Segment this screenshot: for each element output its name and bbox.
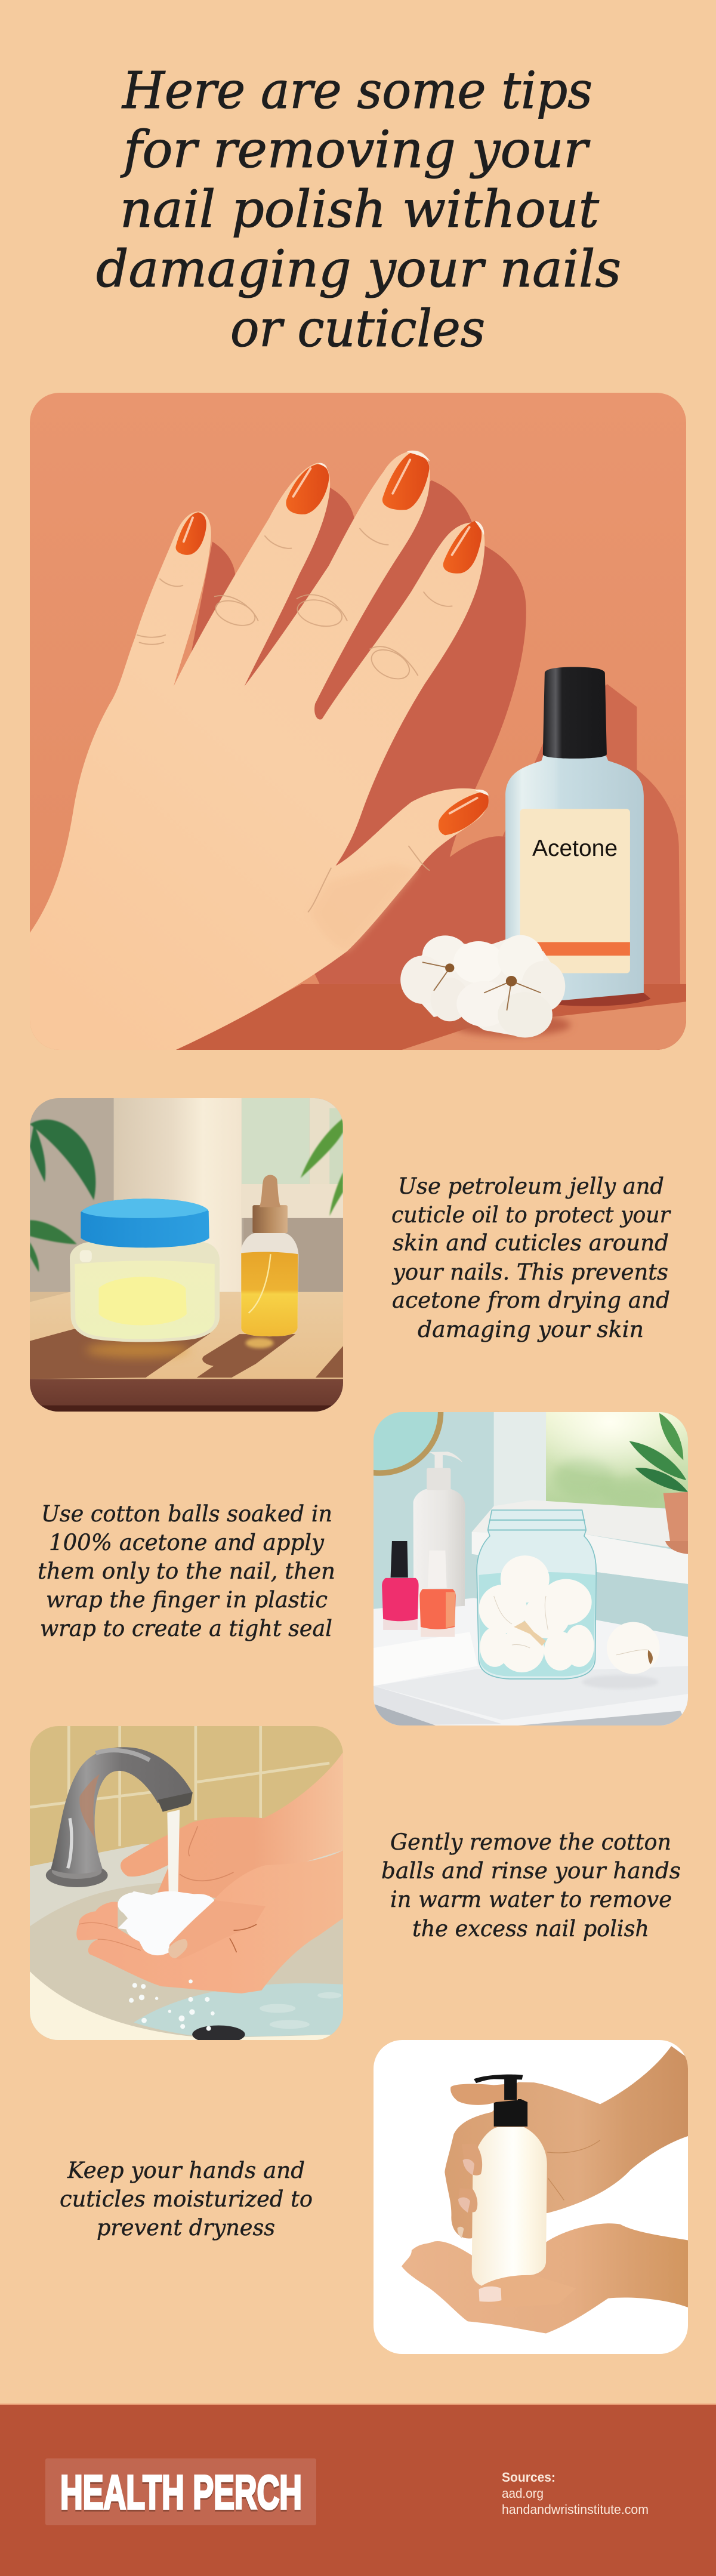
logo box: HEALTH PERCH <box>60 2466 302 2519</box>
text block: tip 2: 100% acetone and apply <box>49 1530 325 1555</box>
nails <box>176 453 489 835</box>
bottle label <box>520 809 630 973</box>
palm crease <box>547 2140 600 2200</box>
sources: handandwristinstitute.com <box>502 2502 649 2517</box>
text block: tip 2: wrap the finger in plastic <box>46 1587 328 1613</box>
text block: tip 4 <box>60 2158 313 2241</box>
icon: dropper bottle <box>240 1175 298 1336</box>
icon: foam <box>118 1891 215 1955</box>
title: for removing your <box>120 121 590 180</box>
text block: tip 1: your nails. This prevents <box>391 1259 668 1285</box>
icon: hand <box>30 451 488 1050</box>
text block: tip 2: them only to the nail, then <box>38 1558 335 1584</box>
nail polish: pink <box>382 1541 419 1630</box>
fingertip nails <box>457 2159 501 2302</box>
text block: tip 3 <box>381 1829 681 1942</box>
basin water <box>134 1983 343 2038</box>
icon: glass jar with cotton balls <box>477 1510 596 1679</box>
text block: tip 4: cuticles moisturized to <box>60 2186 313 2212</box>
plant <box>629 1413 688 1554</box>
thumb over bottle <box>478 2275 576 2307</box>
icon: lower hand <box>402 2223 688 2333</box>
title: nail polish without <box>120 180 600 239</box>
fingertips over bottle <box>458 2144 482 2213</box>
bottle shadow on wall <box>502 684 680 984</box>
sources: Sources: <box>502 2470 555 2485</box>
text block: tip 3: Gently remove the cotton <box>390 1829 671 1855</box>
table front edge <box>30 1379 343 1412</box>
pump stem <box>504 2079 517 2100</box>
text block: tip 2: wrap to create a tight seal <box>40 1616 332 1641</box>
wall tiles <box>30 1726 329 1846</box>
sources: aad.org <box>502 2486 544 2501</box>
table shadows <box>30 1329 343 1379</box>
title: damaging your nails <box>96 240 621 299</box>
text block: tip 1: Use petroleum jelly and <box>398 1173 664 1199</box>
panel: hands holding lotion bottle illustration <box>374 2040 688 2354</box>
pump head <box>474 2075 523 2083</box>
hand inner shading <box>345 870 418 953</box>
bottle label text: Acetone <box>532 836 618 861</box>
logo box <box>45 2458 316 2525</box>
text block: tip 3: in warm water to remove <box>390 1887 672 1912</box>
icon: upper hand <box>445 2046 688 2239</box>
panel: petroleum jelly and cuticle oil illustration <box>30 1098 343 1412</box>
icon: faucet <box>46 1747 193 1887</box>
basin <box>30 1882 343 2040</box>
text block: tip 1: cuticle oil to protect your <box>391 1202 671 1228</box>
text block: tip 2 <box>38 1501 335 1641</box>
text block: tip 2: Use cotton balls soaked in <box>41 1501 332 1527</box>
icon: upper hand <box>121 1752 343 1898</box>
hand shadow on wall <box>183 480 526 984</box>
title: Here are some tips <box>121 61 592 121</box>
icon: acetone bottle <box>505 667 644 1004</box>
text block: tip 1: skin and cuticles around <box>393 1230 669 1256</box>
title <box>96 61 621 359</box>
water stream <box>167 1810 180 1892</box>
text block: tip 3: balls and rinse your hands <box>381 1858 681 1884</box>
sources <box>502 2470 649 2517</box>
icon: loose cotton ball <box>582 1622 660 1689</box>
nail polish: coral <box>419 1551 456 1637</box>
leaves <box>30 1118 343 1272</box>
knuckle creases <box>137 529 452 912</box>
text block: tip 1: acetone from drying and <box>392 1287 670 1313</box>
window view <box>546 1412 688 1508</box>
table surface <box>176 984 686 1050</box>
counter <box>374 1598 688 1725</box>
text block: tip 4: prevent dryness <box>97 2215 275 2241</box>
text block: tip 1: damaging your skin <box>418 1317 644 1342</box>
sink counter <box>30 1844 343 2040</box>
text block: tip 4: Keep your hands and <box>67 2158 305 2183</box>
panel: hero hand, acetone bottle and cotton <box>30 393 686 1050</box>
title: or cuticles <box>230 300 485 359</box>
text block: tip 1 <box>391 1173 671 1342</box>
jar lid <box>81 1198 209 1247</box>
icon: petroleum jelly jar <box>70 1198 220 1342</box>
water droplets <box>129 1979 215 2031</box>
nail highlights and white tips <box>184 460 477 814</box>
finger divisions <box>79 1922 141 1951</box>
bottle contact shadow <box>548 993 650 1006</box>
table <box>30 1292 343 1379</box>
wall mirror <box>374 1412 444 1476</box>
panel: rinsing hands illustration <box>30 1726 343 2044</box>
footer band <box>0 2404 716 2576</box>
pump collar <box>494 2099 527 2127</box>
pump bottle <box>413 1452 465 1609</box>
panel: cotton balls in jar illustration <box>374 1412 688 1725</box>
text block: tip 3: the excess nail polish <box>412 1916 649 1942</box>
drain <box>192 2026 245 2044</box>
logo box: HEALTH PERCH <box>60 2467 302 2520</box>
icon: lower hand <box>76 1850 343 1993</box>
thumb over foam <box>169 1900 266 1959</box>
icon: lotion bottle <box>472 2099 547 2286</box>
icon: cotton bolls <box>400 935 570 1037</box>
thumb tip over pump <box>450 2083 518 2105</box>
